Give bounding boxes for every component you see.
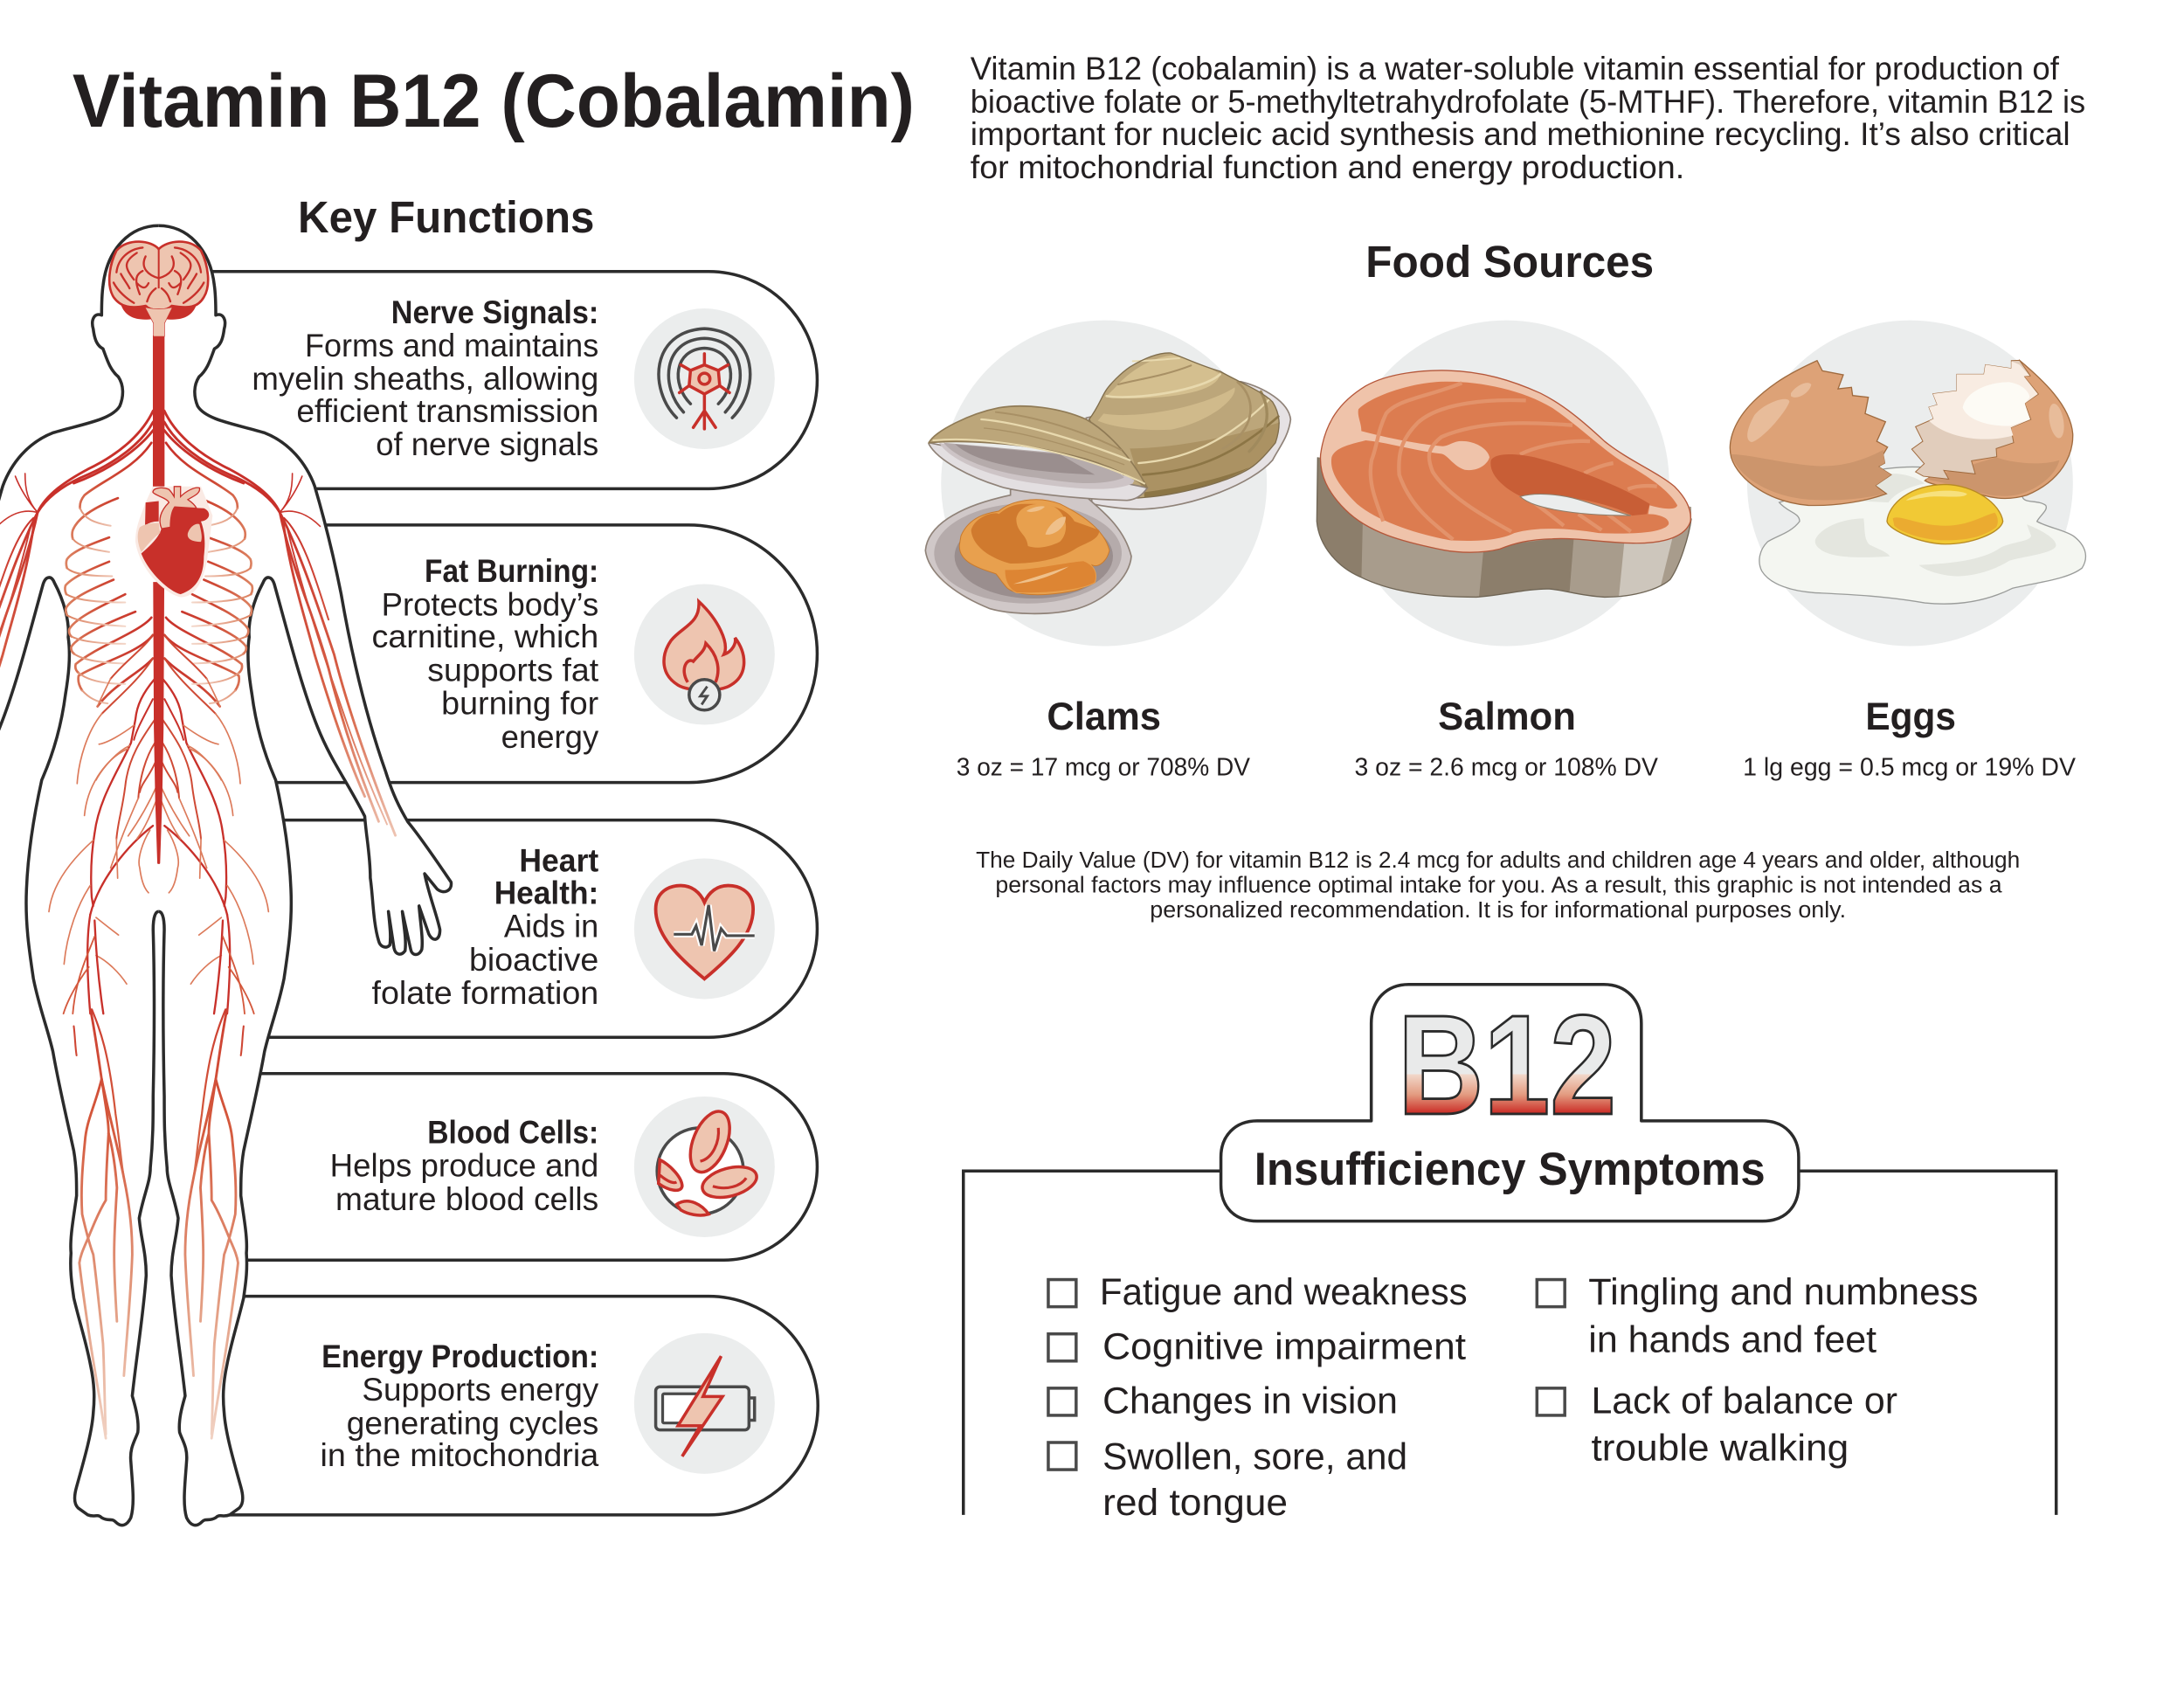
symptom list left column: Swollen, sore, and bbox=[1102, 1435, 1407, 1477]
food labels: eggs bbox=[1743, 695, 2076, 782]
salmon skin side bbox=[1317, 458, 1691, 597]
heart health text: Health: bbox=[494, 874, 598, 910]
heart health text: Aids in bbox=[504, 908, 598, 944]
body outline right half bbox=[159, 225, 451, 1525]
heading: food sources: Food Sources bbox=[1365, 237, 1654, 287]
fat burning text bbox=[371, 552, 599, 755]
food labels: clams: Clams bbox=[1047, 695, 1161, 738]
food labels: salmon bbox=[1355, 695, 1658, 782]
energy production text bbox=[321, 1338, 599, 1473]
egg yolk bbox=[1887, 484, 2003, 544]
nerves right side bbox=[160, 411, 396, 1438]
nerve signals text bbox=[252, 294, 598, 462]
egg shell left bbox=[1730, 361, 1891, 506]
salmon top rim bbox=[1320, 370, 1690, 552]
salmon flesh streaks bbox=[1371, 383, 1657, 539]
human body with nervous system bbox=[0, 225, 451, 1525]
symptom list right column: in hands and feet bbox=[1588, 1318, 1876, 1359]
b12 tab outline bbox=[1221, 985, 1799, 1221]
intro text block: important for nucleic acid synthesis and methionine recycling. It’s also critical bbox=[971, 116, 2070, 152]
intro text block: bioactive folate or 5-methyltetrahydrofolate (5-MTHF). Therefore, vitamin B12 is bbox=[971, 84, 2085, 120]
symptom list right column bbox=[1588, 1271, 1978, 1469]
panel: energy production bbox=[223, 1297, 818, 1515]
symptom list left column: Changes in vision bbox=[1102, 1380, 1398, 1422]
energy production text: Supports energy bbox=[362, 1371, 599, 1408]
heart bbox=[135, 487, 212, 597]
food item: salmon bbox=[1313, 321, 1697, 646]
food labels: salmon: Salmon bbox=[1438, 695, 1576, 738]
clam: pale back shell bbox=[1086, 382, 1290, 509]
nerve signals text: of nerve signals bbox=[376, 425, 598, 462]
energy production text: in the mitochondria bbox=[321, 1436, 598, 1473]
checkboxes bbox=[1048, 1280, 1565, 1470]
nerves left side bbox=[0, 411, 158, 1438]
blood cells text: Blood Cells: bbox=[427, 1113, 598, 1150]
icon: flame bbox=[634, 585, 775, 725]
icon: heart with pulse bbox=[634, 858, 775, 999]
nerve signals text: myelin sheaths, allowing bbox=[252, 360, 598, 397]
food labels: clams bbox=[957, 695, 1250, 782]
title: Vitamin B12 (Cobalamin) bbox=[73, 59, 915, 143]
icon: neuron with myelin arcs bbox=[634, 308, 775, 449]
intro text block bbox=[971, 51, 2085, 185]
intro text block: for mitochondrial function and energy production. bbox=[971, 149, 1684, 185]
energy production text: generating cycles bbox=[347, 1404, 598, 1441]
heart health text: folate formation bbox=[371, 974, 598, 1011]
panel: fat burning bbox=[258, 525, 817, 783]
symptom list right column: Lack of balance or bbox=[1591, 1380, 1897, 1422]
spinal cord bbox=[153, 336, 164, 864]
heart health text bbox=[371, 842, 599, 1011]
food labels: eggs: Eggs bbox=[1865, 695, 1956, 738]
fat burning text: Protects body’s bbox=[382, 585, 598, 622]
symptom list right column: trouble walking bbox=[1591, 1428, 1849, 1469]
icon: blood cells in vessel bbox=[634, 1097, 775, 1237]
symptom list right column: Tingling and numbness bbox=[1588, 1271, 1978, 1312]
food labels: eggs: 1 lg egg = 0.5 mcg or 19% DV bbox=[1743, 754, 2076, 782]
insufficiency heading: Insufficiency Symptoms bbox=[1254, 1144, 1766, 1195]
egg shell right bbox=[1911, 360, 2073, 498]
symptom list left column: Fatigue and weakness bbox=[1100, 1271, 1468, 1312]
frame with B12 tab and heading pill bbox=[964, 1171, 2056, 1515]
nerve signals text: Forms and maintains bbox=[305, 327, 598, 363]
energy production text: Energy Production: bbox=[321, 1338, 598, 1374]
food labels: clams: 3 oz = 17 mcg or 708% DV bbox=[957, 754, 1250, 782]
nerve signals text: Nerve Signals: bbox=[391, 294, 598, 330]
blood cells text: Helps produce and bbox=[330, 1147, 598, 1184]
blood cells text bbox=[330, 1113, 598, 1217]
brain bbox=[109, 242, 208, 336]
clam: lower shell with meat bbox=[925, 489, 1131, 613]
footnote on daily value bbox=[976, 848, 2020, 923]
panel: insufficiency symptoms bbox=[964, 985, 2056, 1523]
icon: battery with lightning bolt bbox=[634, 1333, 775, 1474]
salmon cavity opening bbox=[1520, 494, 1631, 515]
body outline left half bbox=[0, 225, 159, 1525]
heart health text: Heart bbox=[519, 842, 599, 879]
footnote on daily value: The Daily Value (DV) for vitamin B12 is 2.4 mcg for adults and children age 4 years and older, although bbox=[976, 848, 2020, 873]
salmon belly cavity bbox=[1490, 454, 1649, 515]
b12 badge text: B12 bbox=[1398, 986, 1616, 1145]
fat burning text: carnitine, which bbox=[371, 618, 598, 654]
footnote on daily value: personalized recommendation. It is for informational purposes only. bbox=[1150, 898, 1846, 923]
blood cells text: mature blood cells bbox=[335, 1180, 598, 1217]
symptom list left column bbox=[1100, 1271, 1468, 1523]
heading: key functions: Key Functions bbox=[298, 192, 594, 242]
food item: eggs bbox=[1730, 321, 2085, 646]
panel: blood cells bbox=[230, 1074, 817, 1260]
salmon flesh bbox=[1331, 382, 1677, 541]
fat burning text: supports fat bbox=[427, 651, 599, 688]
food labels: salmon: 3 oz = 2.6 mcg or 108% DV bbox=[1355, 754, 1658, 782]
fat burning text: burning for bbox=[441, 685, 598, 722]
intro text block: Vitamin B12 (cobalamin) is a water-soluble vitamin essential for production of bbox=[971, 51, 2060, 86]
fat burning text: Fat Burning: bbox=[425, 552, 598, 589]
symptom list left column: red tongue bbox=[1102, 1482, 1288, 1523]
egg white bbox=[1759, 467, 2085, 604]
food item: clams bbox=[925, 321, 1290, 646]
fat burning text: energy bbox=[501, 718, 598, 755]
clam: open upper shell bbox=[929, 406, 1147, 501]
panel: heart health bbox=[258, 820, 817, 1037]
symptom list left column: Cognitive impairment bbox=[1102, 1325, 1466, 1366]
heart health text: bioactive bbox=[469, 941, 598, 978]
footnote on daily value: personal factors may influence optimal intake for you. As a result, this graphic is not intended as a bbox=[995, 874, 2002, 898]
clam: closed ridged shell bbox=[1089, 353, 1280, 498]
panel: nerve signals bbox=[206, 272, 817, 488]
nerve signals text: efficient transmission bbox=[296, 392, 598, 429]
salmon side outline bbox=[1317, 457, 1691, 597]
